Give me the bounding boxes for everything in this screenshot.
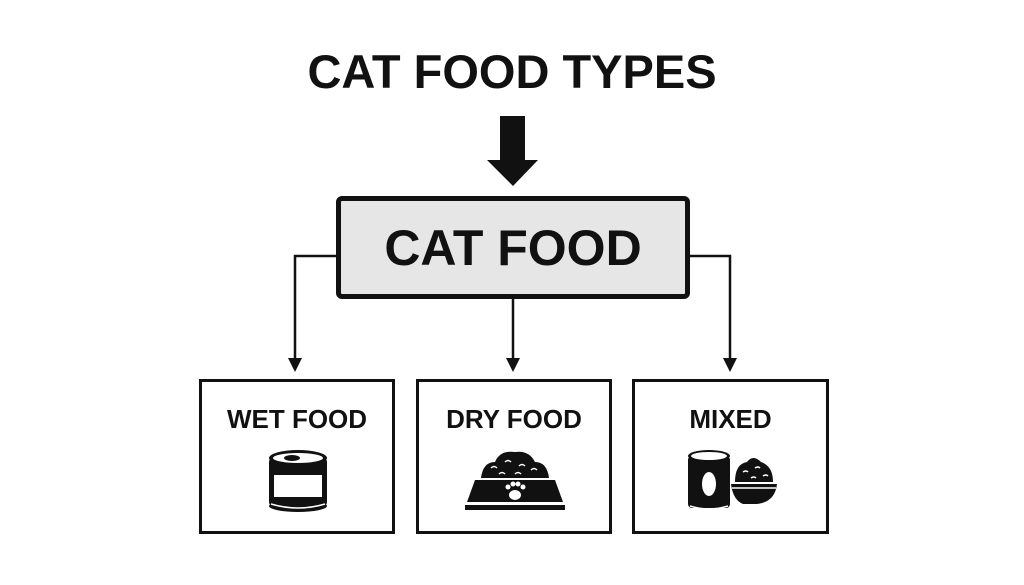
icon: bowl with kibble [465,452,565,510]
arrow: to mixed [688,256,737,372]
main box: cat food [336,196,690,299]
arrow: title to main [487,116,538,186]
main box: cat food: CAT FOOD [384,220,642,276]
panel: mixed [632,379,829,534]
panel: dry food [416,379,612,534]
title: CAT FOOD TYPES [307,45,717,98]
panel: wet food [199,379,395,534]
icon: can and bowl [688,450,777,508]
arrow: to wet food [288,256,338,372]
icon: can [269,450,327,512]
label: wet food: WET FOOD [227,404,367,434]
label: mixed: MIXED [689,404,772,434]
label: dry food: DRY FOOD [446,404,582,434]
arrow: to dry food [506,298,520,372]
